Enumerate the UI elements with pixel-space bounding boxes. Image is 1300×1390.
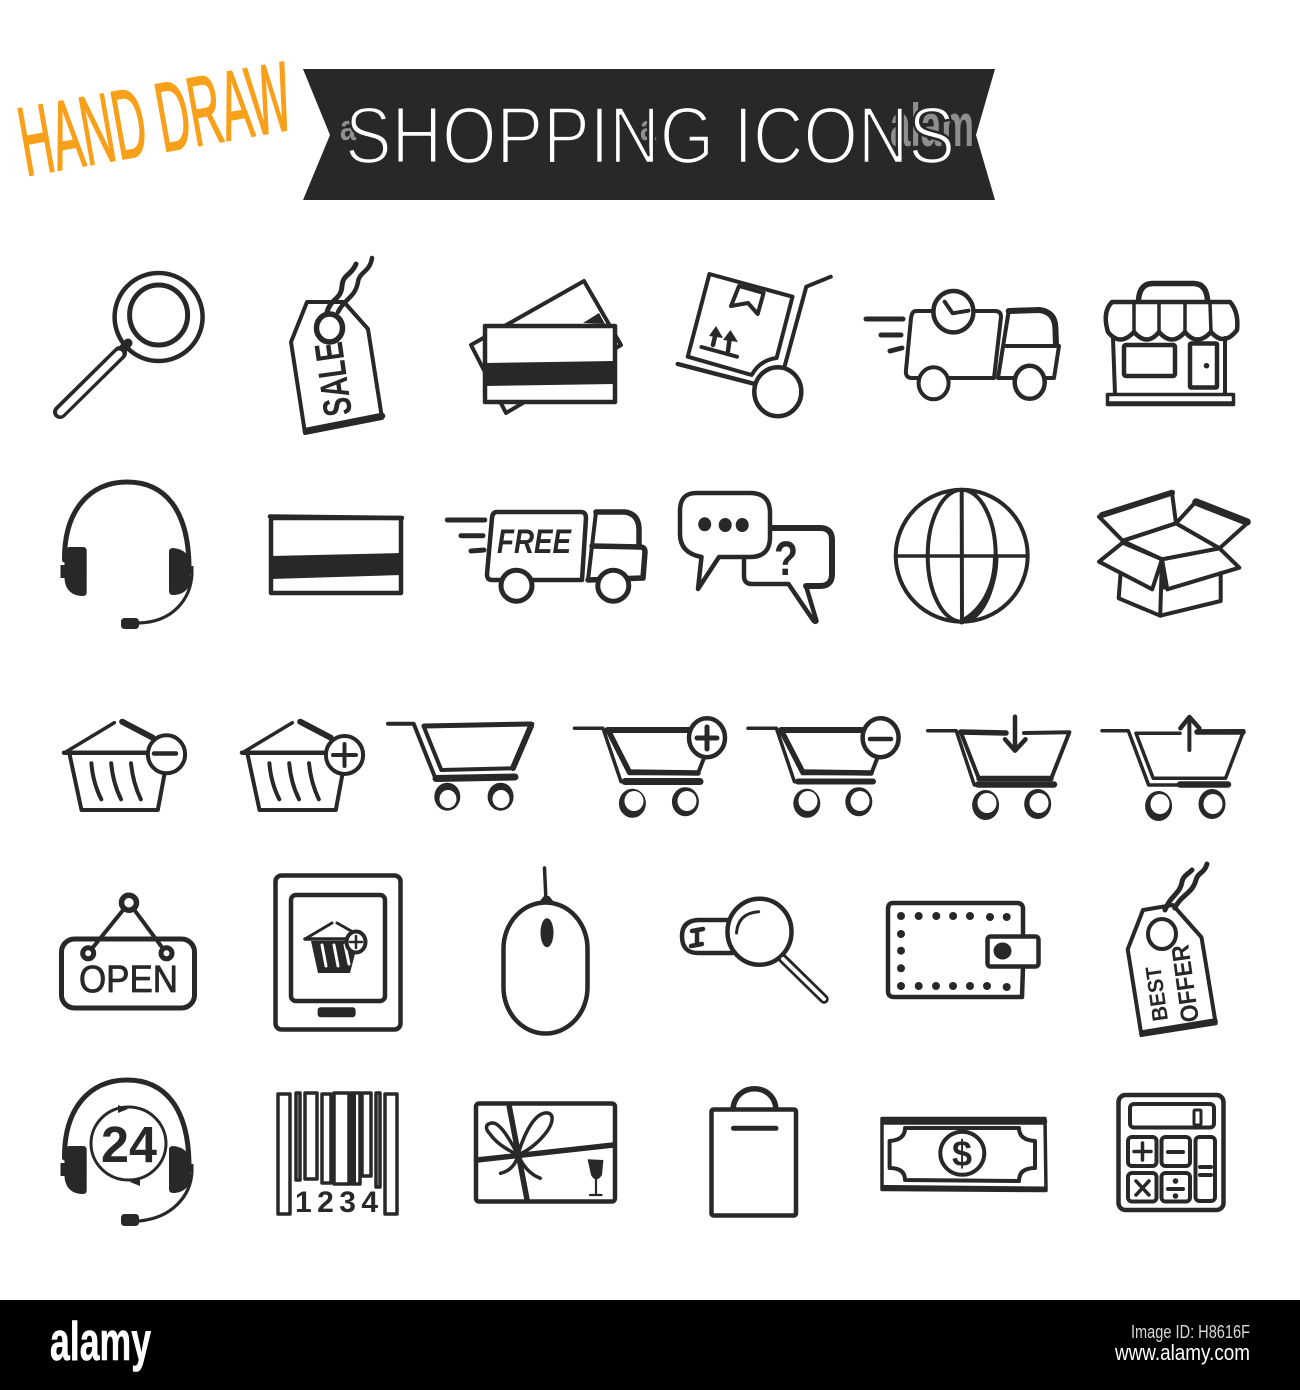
circular arrow heads — [118, 1105, 128, 1113]
icon: open sign — [62, 895, 194, 1008]
image id: Image ID: H8616F — [1131, 1322, 1250, 1342]
icon: shop — [1106, 284, 1237, 404]
watermark fragments: a — [640, 107, 657, 148]
icon: sale tag — [291, 258, 382, 433]
arrow up — [1187, 717, 1191, 750]
24 label: 24 — [101, 1116, 158, 1173]
icon: wallet — [888, 903, 1038, 997]
icon: best offer tag — [1128, 864, 1216, 1035]
shop door — [1190, 344, 1217, 388]
icon: globe — [896, 490, 1028, 622]
website: www.alamy.com — [1114, 1340, 1250, 1365]
footer logo: alamy — [50, 1310, 151, 1372]
watermark fragments — [340, 92, 974, 159]
icon: open box — [1099, 493, 1248, 616]
best label: BEST — [1140, 964, 1173, 1023]
icon: shopping bag — [712, 1089, 796, 1216]
icon: delivery truck with clock — [866, 291, 1059, 399]
dollar sign: $ — [952, 1133, 972, 1174]
icon: barcode — [278, 1093, 397, 1219]
icon: hand truck with box — [678, 274, 831, 416]
icon: cart add down arrow — [928, 717, 1069, 820]
arrow down — [1013, 717, 1017, 750]
title text: SHOPPING ICONS — [345, 91, 955, 181]
icon: headset — [60, 482, 194, 629]
icon: calculator — [1118, 1095, 1224, 1210]
watermark fragments: a — [340, 107, 357, 148]
second speech bubble — [744, 528, 832, 622]
icon: shopping cart — [388, 724, 532, 811]
icon: tablet with basket — [276, 876, 400, 1030]
icon: computer mouse — [504, 868, 588, 1034]
open label: OPEN — [79, 959, 178, 1001]
icon: cart plus — [574, 718, 725, 818]
icon: gift card — [476, 1104, 615, 1202]
barcode digits: 1234 — [295, 1186, 378, 1219]
bow — [486, 1123, 518, 1155]
small basket — [305, 923, 366, 973]
offer label: OFFER — [1166, 943, 1205, 1024]
icon: bank card — [270, 516, 402, 593]
icon: cart minus — [748, 718, 899, 818]
clock — [933, 291, 973, 332]
icon: basket plus — [242, 722, 363, 810]
first speech bubble — [680, 493, 770, 589]
wine glass symbol — [588, 1159, 603, 1180]
question mark: ? — [774, 533, 798, 586]
icon: cart remove up arrow — [1102, 717, 1244, 821]
icon: credit cards — [471, 281, 621, 413]
icon: free delivery truck — [447, 512, 645, 601]
icon: chat bubbles — [680, 493, 832, 622]
text cursor — [691, 929, 703, 946]
icon: banknote — [882, 1118, 1046, 1190]
wallet clasp — [988, 936, 1038, 966]
title banner — [303, 69, 995, 200]
icon: magnifier — [60, 273, 203, 412]
icon: basket minus — [64, 722, 185, 810]
shop window — [1124, 345, 1175, 376]
icon: 24 hour support headset — [60, 1080, 194, 1226]
watermark fragments: alam — [890, 92, 974, 159]
microphone boom — [139, 573, 192, 623]
icon: search bar magnifier — [682, 899, 824, 999]
free label: FREE — [497, 523, 572, 561]
footer bar — [0, 1300, 1300, 1390]
sale label: SALE — [307, 339, 361, 419]
